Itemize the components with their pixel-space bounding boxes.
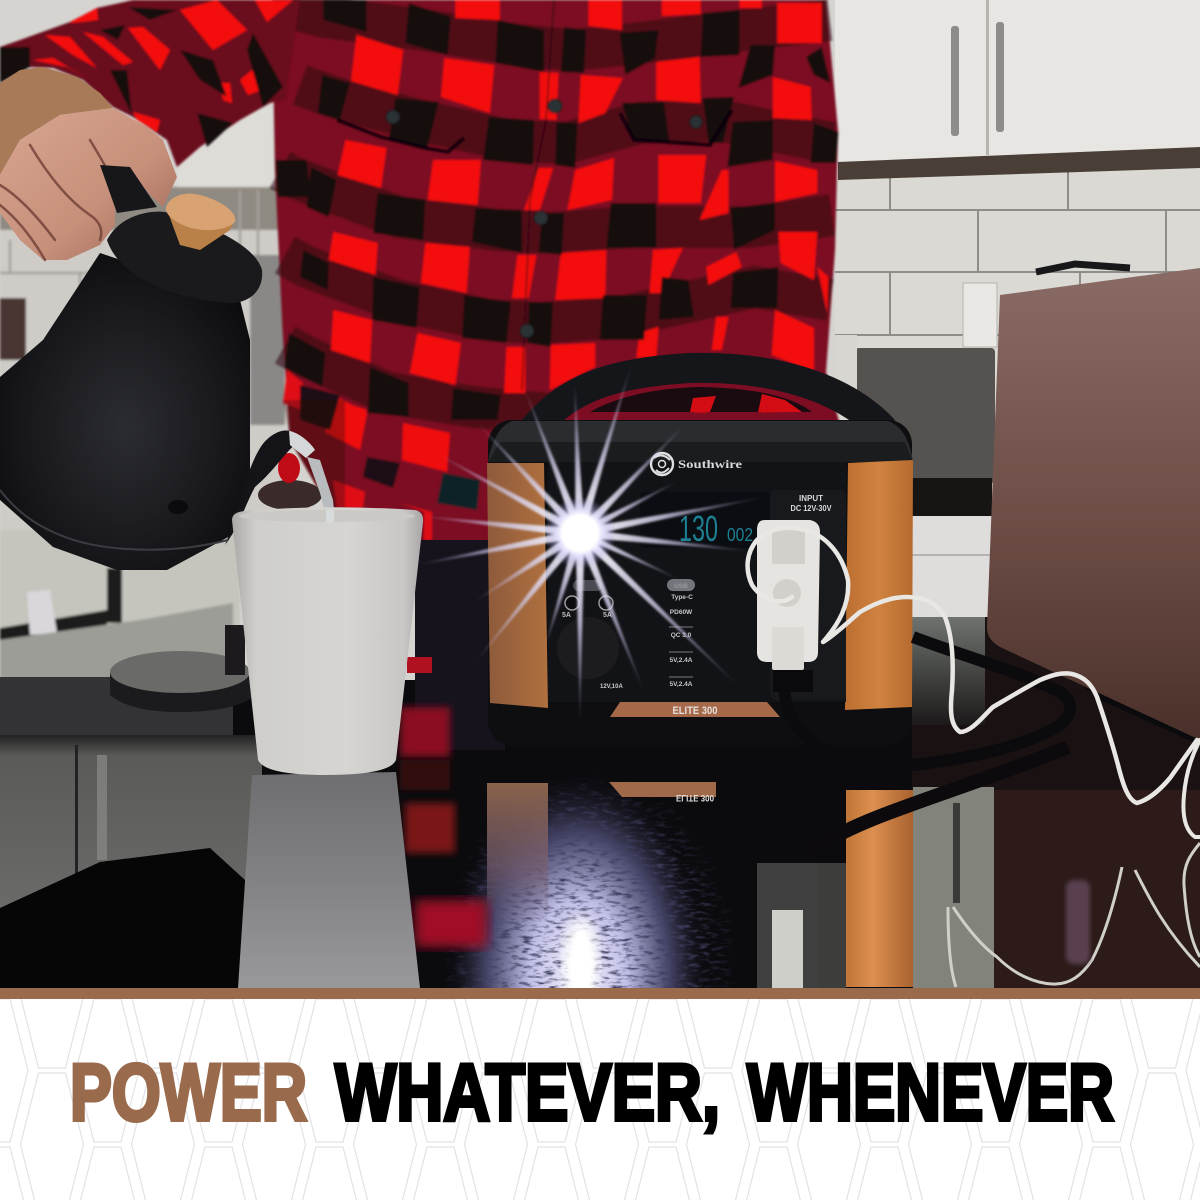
DC ports [557, 580, 623, 690]
LCD display: 002 [727, 525, 753, 545]
hexagon pattern [0, 999, 1200, 1200]
cable reflections [948, 843, 1200, 987]
lens flare starburst [417, 364, 762, 723]
cork knob [166, 194, 235, 250]
mug [232, 507, 423, 775]
countertop rear right [912, 617, 1200, 790]
white adapter [757, 520, 820, 692]
red reflections [405, 803, 455, 853]
USB ports: Type-C [671, 594, 693, 601]
water stream [289, 431, 335, 520]
top band [488, 421, 913, 462]
USB ports: 5V,2.4A [670, 681, 693, 688]
headline words: whatever: WHATEVER, [335, 1048, 720, 1138]
headline word: power: POWER [70, 1048, 307, 1138]
forearm and hand [0, 67, 177, 260]
left blurred kitchen wall [0, 107, 285, 680]
USB ports: PD60W [670, 609, 693, 616]
model badge [610, 702, 780, 717]
USB ports: 5V,2.4A [670, 657, 693, 664]
stove [835, 264, 1130, 620]
granite dark flecks [446, 780, 732, 988]
kettle body [0, 253, 250, 570]
red seen behind spout [278, 453, 300, 483]
DC ports: 5A [562, 612, 571, 619]
headline [70, 1048, 1114, 1138]
model badge: ELITE 300 [672, 705, 718, 717]
adapter reflection [757, 863, 846, 988]
brand logo [651, 453, 743, 475]
laptop reflection [994, 790, 1200, 988]
white cable [748, 528, 1200, 837]
cord reflection [808, 747, 1068, 853]
badge reflection [609, 782, 716, 803]
USB ports: USB [674, 583, 688, 590]
kettle lid [107, 212, 262, 303]
kettle handle [100, 165, 157, 213]
LCD display [640, 492, 770, 549]
laptop [987, 268, 1200, 740]
kettle base disc [110, 625, 252, 712]
USB ports [667, 579, 695, 688]
upper cabinets [835, 0, 1200, 180]
granite sheen [448, 775, 708, 1175]
lower shirt squares [283, 370, 480, 540]
kettle spout [225, 431, 300, 545]
brand logo: Southwire [678, 457, 743, 471]
black power cord [784, 637, 1070, 767]
handle [535, 368, 882, 428]
dark horizontal plaid bands [280, 8, 832, 415]
left copper reflection [487, 783, 548, 923]
LCD display: 130 [679, 508, 718, 549]
right copper reflection [846, 790, 913, 987]
brown divider bar [0, 988, 1200, 999]
wall reflection [913, 787, 994, 988]
kettle knob [168, 500, 188, 514]
shadow behind spout [258, 480, 322, 510]
left reflection of cabinets [0, 735, 262, 988]
red squares [328, 0, 828, 425]
countertop rear left [0, 677, 233, 735]
sleeve [0, 0, 300, 167]
DC ports: 5A [603, 612, 612, 619]
body [488, 420, 912, 745]
countertop [0, 540, 1200, 988]
left copper panel [487, 463, 548, 708]
gap under handle [590, 387, 812, 412]
badge reflection: ELITE 300 [676, 792, 714, 803]
input label [790, 494, 832, 513]
finger creases [0, 140, 110, 260]
forearm [0, 67, 113, 175]
right copper panel [845, 460, 913, 710]
pocket flaps and buttons [337, 0, 732, 390]
DC ports: 12V,10A [600, 684, 623, 690]
shirt torso plaid [272, 0, 840, 640]
front upper panel [548, 462, 846, 702]
mug reflection [238, 772, 420, 988]
bottom banner [0, 999, 1200, 1200]
input label: DC 12V-30V [790, 504, 832, 513]
kettle base ring [0, 490, 228, 550]
hand [0, 108, 177, 260]
right subway tile wall [835, 165, 1200, 515]
lamp reflection [564, 918, 598, 1002]
kettle [0, 165, 322, 570]
black squares [276, 0, 838, 420]
input label: INPUT [799, 494, 823, 503]
USB ports: QC 3.0 [671, 632, 692, 639]
power station [487, 368, 913, 745]
product reflection [609, 747, 1200, 988]
